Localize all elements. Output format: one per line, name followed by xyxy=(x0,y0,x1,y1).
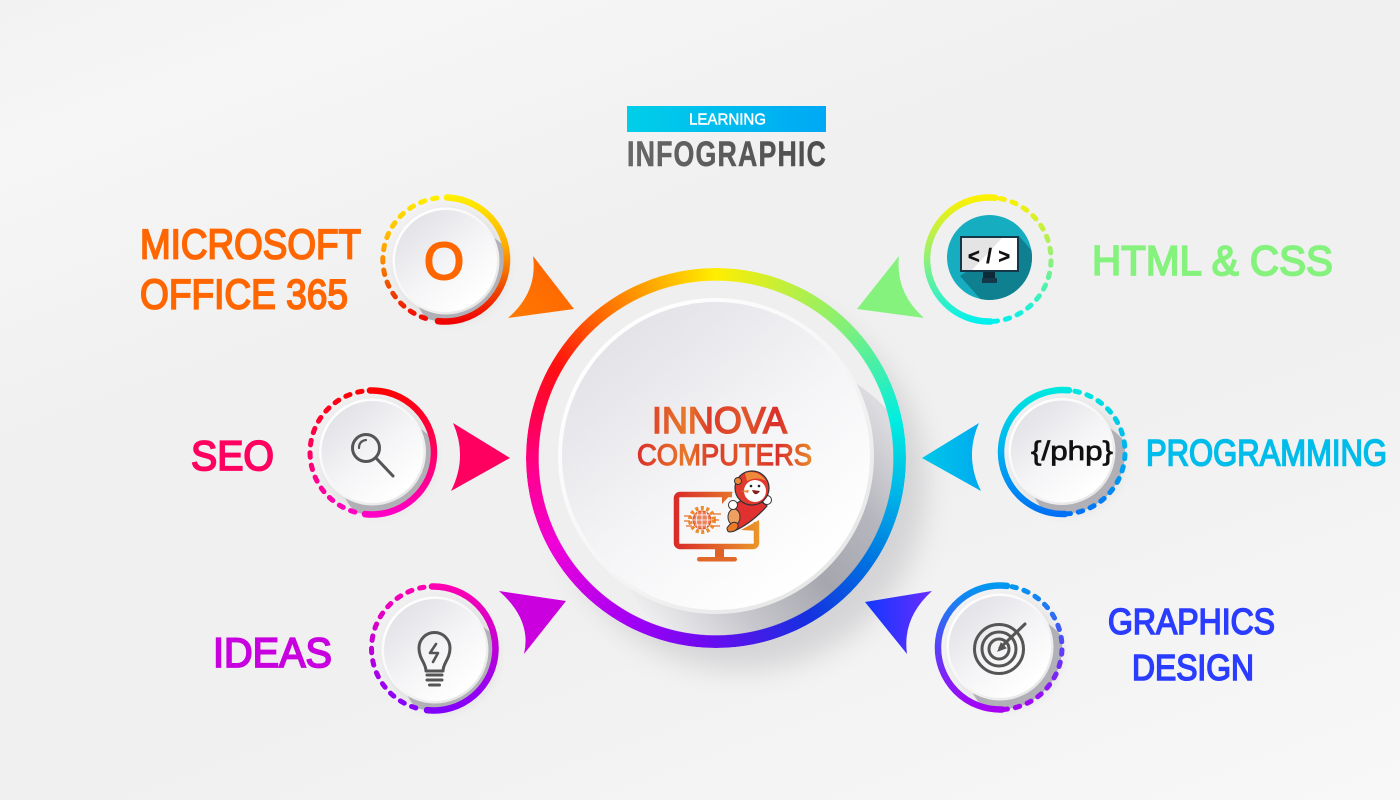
label: graphics design: GRAPHICS xyxy=(1108,601,1275,642)
arrow: html xyxy=(857,256,924,318)
disc: graphics xyxy=(946,594,1062,710)
panel: programming xyxy=(922,390,1387,526)
central disc xyxy=(558,298,874,614)
main artwork xyxy=(140,106,1386,714)
gear and globe xyxy=(684,508,721,532)
icon: magnifying glass xyxy=(352,434,393,476)
progress ring: office xyxy=(383,198,507,321)
disc: php xyxy=(1008,398,1125,514)
rocket mascot xyxy=(727,471,772,532)
title banner: learning: LEARNING xyxy=(689,112,766,128)
panel: seo xyxy=(191,390,510,527)
icon: light bulb xyxy=(419,632,450,685)
progress ring: html xyxy=(927,198,1051,322)
arrow: office xyxy=(508,256,574,318)
central brand name: COMPUTERS xyxy=(637,439,812,472)
progress ring: seo xyxy=(310,390,434,514)
central brand name: INNOVA xyxy=(652,400,787,441)
title banner: learning xyxy=(627,106,826,132)
label: graphics design: DESIGN xyxy=(1132,647,1254,688)
panel: graphics design xyxy=(865,586,1275,722)
label: microsoft office 365 xyxy=(140,220,361,318)
arrow: ideas xyxy=(499,591,566,654)
arrow: programming xyxy=(922,423,981,491)
title: infographic: INFOGRAPHIC xyxy=(627,135,827,174)
arrow: graphics xyxy=(865,591,932,654)
progress ring: ideas xyxy=(372,587,496,711)
title block xyxy=(627,106,827,174)
icon: target with arrow xyxy=(974,624,1025,674)
panel: html and css xyxy=(857,198,1333,322)
label: microsoft office 365: OFFICE 365 xyxy=(140,270,348,318)
label: graphics design xyxy=(1108,601,1275,688)
disc: office xyxy=(392,208,504,320)
label: microsoft office 365: MICROSOFT xyxy=(140,220,361,268)
icon: letter O: O xyxy=(424,233,464,291)
panel: ideas xyxy=(213,587,566,725)
icon: computer monitor with rocket mascot xyxy=(676,471,772,562)
icon: code monitor badge: </> xyxy=(968,246,1010,268)
icon: code monitor badge xyxy=(947,215,1032,300)
progress ring: php xyxy=(1001,390,1125,514)
panel: microsoft office 365 xyxy=(140,198,574,336)
central rainbow ring xyxy=(526,268,906,648)
disc: seo xyxy=(319,398,431,514)
label: seo: SEO xyxy=(191,432,274,479)
icon: php code text: {/php} xyxy=(1031,436,1113,466)
progress ring: graphics xyxy=(938,586,1062,710)
label: ideas: IDEAS xyxy=(213,629,332,676)
arrow: seo xyxy=(451,423,510,491)
disc: ideas xyxy=(382,596,496,712)
central brand name xyxy=(637,400,812,472)
central disc shadow xyxy=(586,338,934,678)
label: html and css: HTML & CSS xyxy=(1092,237,1333,284)
